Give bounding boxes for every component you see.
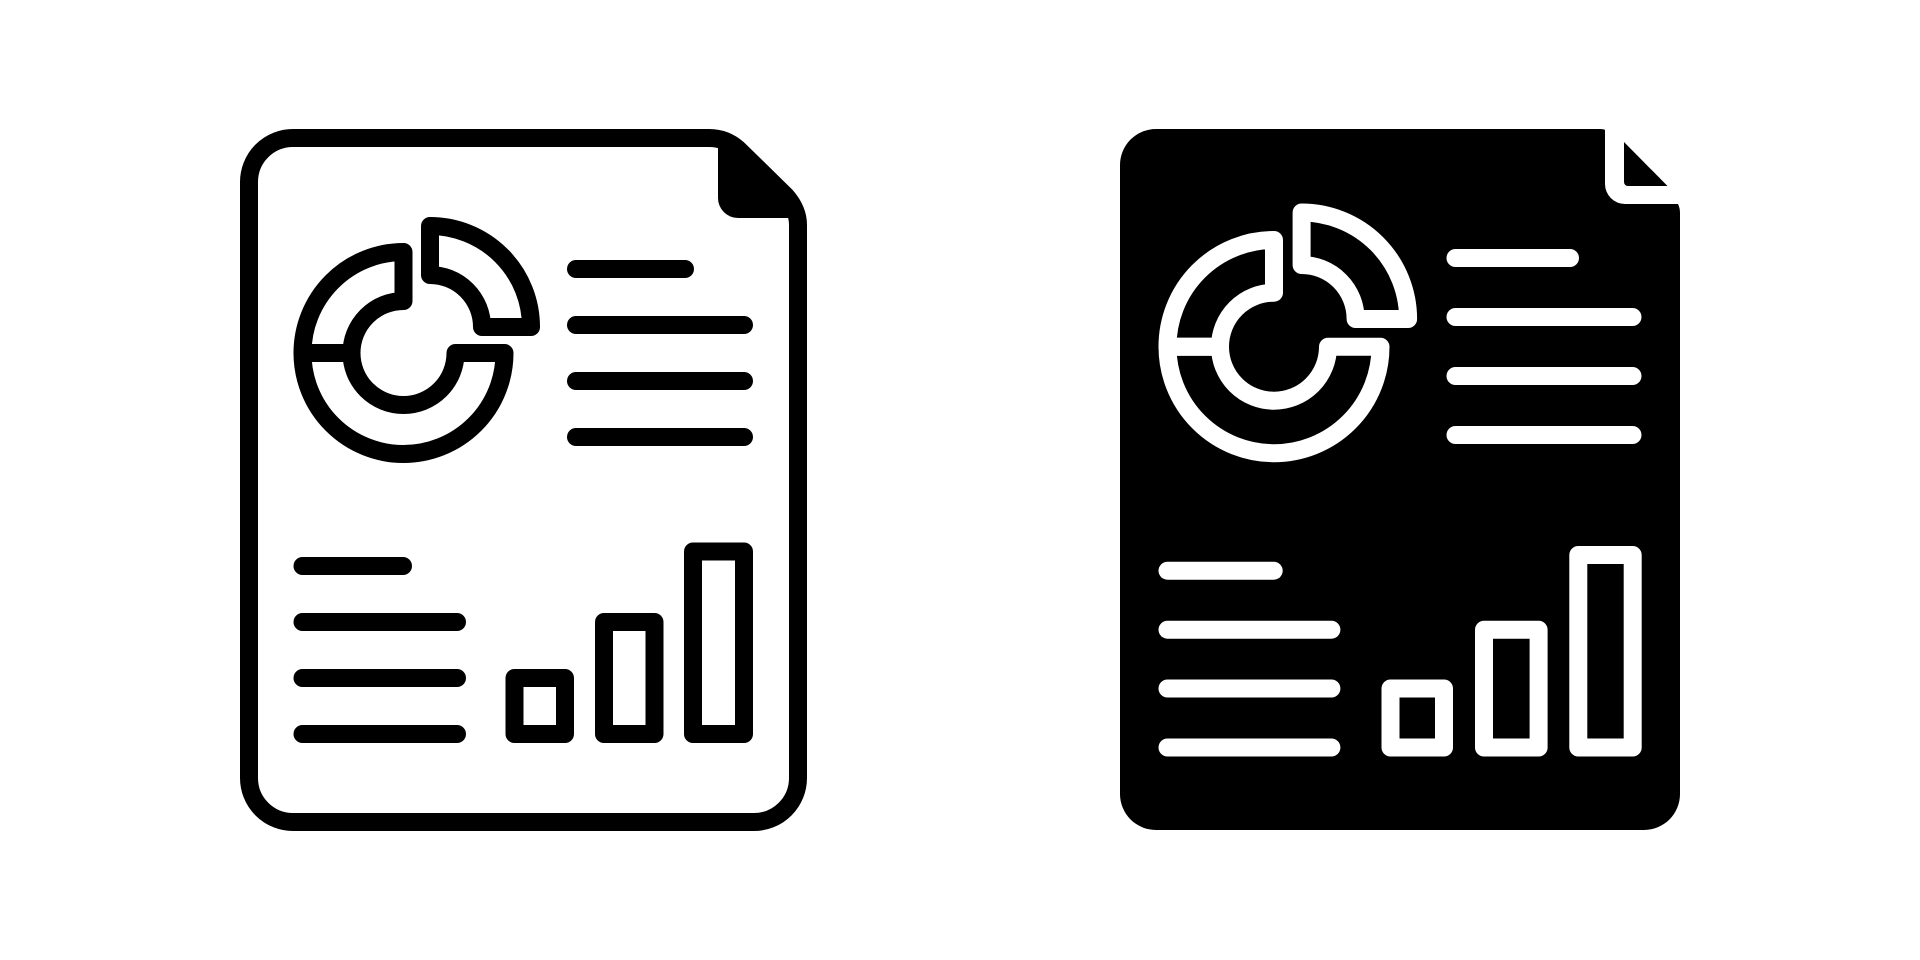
icon: solid document report [1120,129,1680,830]
donut segment: upper left [302,252,404,353]
donut chart [1167,212,1408,453]
bar: medium [604,622,654,734]
folded corner [712,132,806,218]
bar chart [514,552,744,734]
text lines: upper right [576,269,744,437]
solid page [1120,129,1680,830]
bar chart [1390,555,1633,748]
donut segment: bottom [1168,347,1380,453]
bar: tall [693,552,744,734]
text lines: lower left [302,566,457,734]
bar: tall [1578,555,1633,748]
folded corner triangle [1624,142,1668,186]
donut segment: upper left [1167,240,1274,347]
donut segment: upper right [1302,212,1408,319]
text lines: upper right [1456,258,1632,435]
page outline [249,138,798,822]
icon: outline document report [249,132,806,822]
bar: medium [1484,630,1539,748]
text lines: lower left [1168,571,1331,748]
white artwork on page [1167,212,1633,748]
donut segment: bottom [302,353,504,454]
donut chart [302,226,531,454]
donut segment: upper right [430,226,531,327]
bar: small [1390,688,1444,748]
bar: small [514,678,565,734]
